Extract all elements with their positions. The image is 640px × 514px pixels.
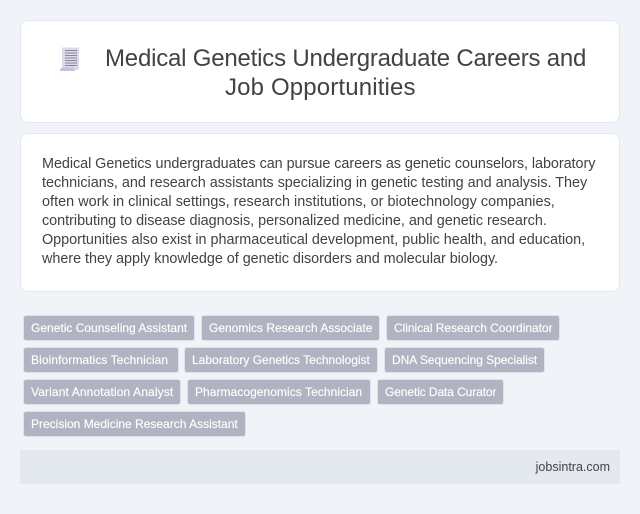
description text: technicians, and research assistants specializing in genetic testing and analysis. They	[42, 175, 587, 191]
tag list	[23, 315, 560, 437]
footer bar	[20, 450, 620, 484]
description text: where they apply knowledge of genetic disorders and molecular biology.	[42, 251, 498, 267]
tag: Laboratory Genetics Technologist	[192, 353, 370, 367]
panel: description card	[20, 133, 620, 292]
tag: Variant Annotation Analyst	[31, 385, 173, 399]
title: Job Opportunities	[225, 74, 416, 101]
tag	[23, 411, 246, 437]
title: Medical Genetics Undergraduate Careers and	[105, 45, 586, 72]
tag	[386, 315, 560, 341]
description text: Opportunities also exist in pharmaceutical development, public health, and education,	[42, 232, 585, 248]
tag	[377, 379, 504, 405]
title	[105, 45, 586, 101]
footer source text: jobsintra.com	[536, 460, 610, 474]
tag	[23, 315, 195, 341]
tag	[384, 347, 545, 373]
description text: often work in clinical settings, research institutions, or biotechnology companies,	[42, 194, 555, 210]
description text: Medical Genetics undergraduates can pursue careers as genetic counselors, laboratory	[42, 156, 595, 172]
tag: Genetic Data Curator	[385, 385, 496, 399]
tag	[184, 347, 378, 373]
tag	[201, 315, 380, 341]
tag	[23, 379, 181, 405]
tag: Precision Medicine Research Assistant	[31, 417, 238, 431]
tag: Genetic Counseling Assistant	[31, 321, 187, 335]
description text: contributing to disease diagnosis, personalized medicine, and genetic research.	[42, 213, 547, 229]
tag: DNA Sequencing Specialist	[392, 353, 537, 367]
icon: document scroll	[60, 48, 79, 71]
panel: header card	[20, 20, 620, 123]
tag	[187, 379, 371, 405]
tag: Bioinformatics Technician	[31, 353, 168, 367]
tag: Pharmacogenomics Technician	[195, 385, 362, 399]
tag: Genomics Research Associate	[209, 321, 372, 335]
description text	[42, 156, 596, 267]
tag	[23, 347, 179, 373]
tag: Clinical Research Coordinator	[394, 321, 553, 335]
